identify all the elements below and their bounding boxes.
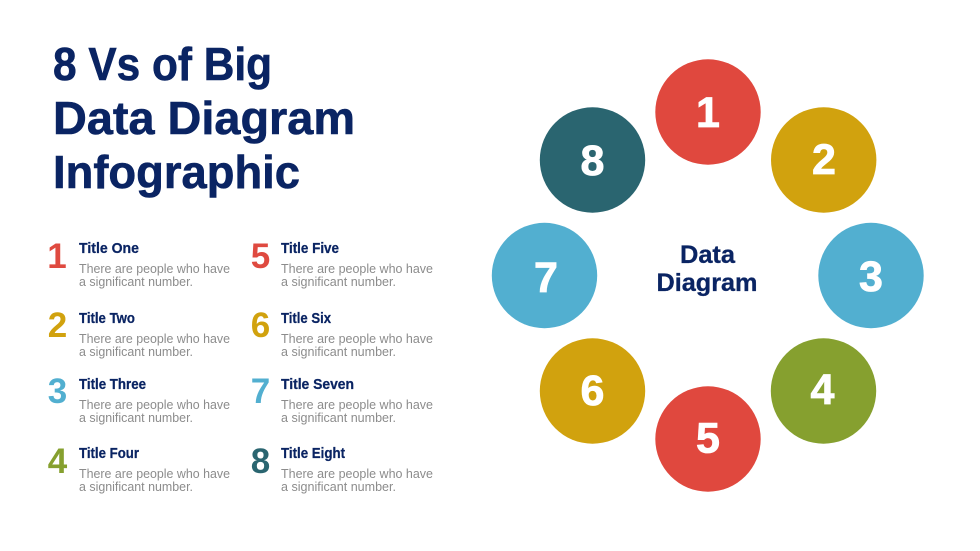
list item 5: There are people who have (281, 262, 433, 276)
list item 3: 3 (48, 372, 67, 411)
circle 3: 3 (859, 253, 883, 301)
circle 5 (655, 386, 761, 492)
list item 7: Title Seven (281, 377, 354, 393)
list item 4: 4 (48, 442, 68, 481)
circle 2 (771, 107, 876, 213)
list item 6: a significant number. (281, 345, 396, 359)
list item 5: Title Five (281, 241, 339, 257)
title (53, 38, 355, 198)
circle 4 (771, 338, 876, 444)
list item 3: a significant number. (79, 411, 193, 425)
circle 5: 5 (696, 414, 720, 462)
list item 8: There are people who have (281, 467, 433, 481)
list item 6: Title Six (281, 311, 331, 327)
center label: Data (680, 241, 736, 269)
list item 2: There are people who have (79, 332, 230, 346)
list item 4 (48, 442, 230, 494)
list item 5: 5 (251, 237, 270, 276)
list item 8: 8 (251, 442, 270, 481)
circle 8 (540, 107, 645, 213)
list item 2: Title Two (79, 311, 135, 327)
list item 8 (251, 442, 433, 494)
list item 7 (251, 372, 433, 425)
list item 8: Title Eight (281, 446, 345, 462)
list item 1: There are people who have (79, 262, 230, 276)
list item 1: Title One (79, 241, 139, 257)
list item 5: a significant number. (281, 275, 396, 289)
center label (656, 241, 758, 297)
list item 3: Title Three (79, 377, 146, 393)
list item 2 (48, 306, 230, 359)
list item 4: a significant number. (79, 480, 193, 494)
circle 8: 8 (581, 137, 604, 185)
circle 4: 4 (811, 366, 835, 414)
center label: Diagram (656, 269, 758, 297)
list item 1: 1 (47, 237, 67, 276)
circle 6: 6 (581, 367, 604, 415)
list item 3 (48, 372, 230, 425)
circle 1 (655, 59, 761, 165)
list item 7: There are people who have (281, 398, 433, 412)
circle 3 (818, 223, 924, 328)
list item 1 (47, 237, 230, 289)
circle 1: 1 (696, 89, 720, 137)
list item 7: a significant number. (281, 411, 396, 425)
circle 2: 2 (812, 136, 836, 184)
circle 6 (540, 338, 645, 444)
list item 6: 6 (251, 306, 270, 345)
list item 6 (251, 306, 433, 359)
list item 3: There are people who have (79, 398, 230, 412)
list item 2: 2 (48, 306, 67, 345)
title: 8 Vs of Big (53, 38, 272, 90)
list item 4: There are people who have (79, 467, 230, 481)
circle 7: 7 (534, 254, 558, 302)
list item 7: 7 (251, 372, 270, 411)
list item 5 (251, 237, 433, 289)
circle 7 (492, 223, 597, 328)
title: Data Diagram (53, 92, 355, 144)
title: Infographic (53, 146, 300, 198)
list item 8: a significant number. (281, 480, 396, 494)
list item 6: There are people who have (281, 332, 433, 346)
list item 1: a significant number. (79, 275, 193, 289)
list item 2: a significant number. (79, 345, 193, 359)
list item 4: Title Four (79, 446, 139, 462)
